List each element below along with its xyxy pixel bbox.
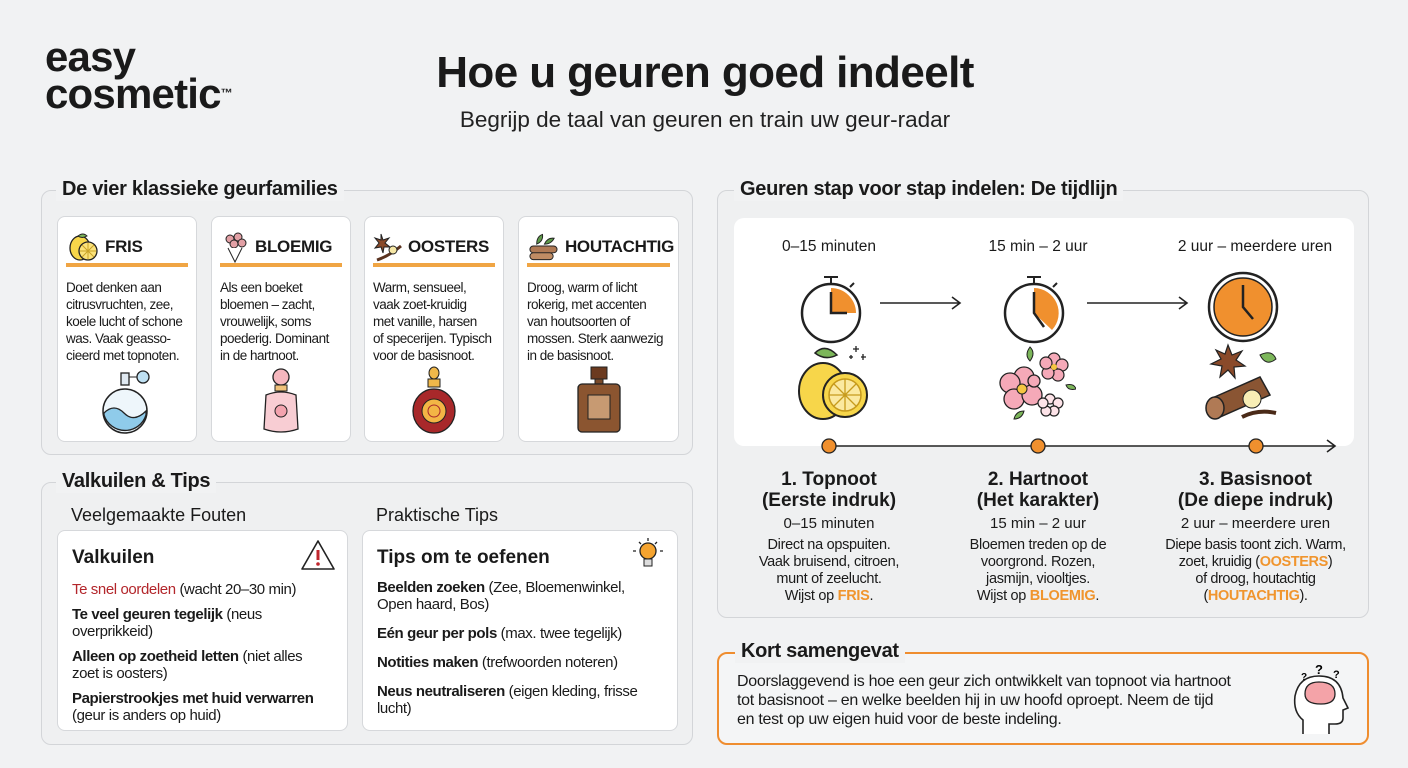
card: OOSTERS bbox=[364, 216, 504, 442]
icon: warning bbox=[301, 540, 335, 570]
icon: lemon bbox=[798, 346, 868, 420]
icon: red bottle bbox=[412, 366, 456, 434]
box: tips: Neus neutraliseren (eigen kleding, frisse bbox=[377, 683, 637, 700]
step 1: Vaak bruisend, citroen, bbox=[759, 554, 899, 570]
panel: tijdlijn: 15 min – 2 uur bbox=[988, 238, 1088, 255]
card: HOUTACHTIG: mossen. Sterk aanwezig bbox=[527, 331, 663, 346]
step 2 bbox=[970, 469, 1106, 604]
heading: families: De vier klassieke geurfamilies bbox=[62, 178, 338, 200]
white area bbox=[734, 218, 1354, 446]
text: summary: Doorslaggevend is hoe een geur zich ontwikkelt van topnoot via hartnoot bbox=[737, 673, 1231, 690]
card: OOSTERS: voor de basisnoot. bbox=[373, 348, 474, 363]
box: tips: Notities maken (trefwoorden noteren) bbox=[377, 654, 618, 671]
card: OOSTERS: Warm, sensueel, bbox=[373, 280, 466, 295]
step 3 bbox=[1165, 469, 1346, 604]
heading: valkuilen: Valkuilen & Tips bbox=[62, 470, 210, 492]
timeline bbox=[821, 438, 1336, 454]
step 3: zoet, kruidig (OOSTERS) bbox=[1179, 554, 1332, 570]
logo bbox=[45, 33, 232, 117]
icon: stopwatch 2 bbox=[1004, 276, 1064, 344]
step 3: (HOUTACHTIG). bbox=[1203, 588, 1308, 604]
card: HOUTACHTIG: van houtsoorten of bbox=[527, 314, 630, 329]
step 1: Direct na opspuiten. bbox=[768, 537, 890, 553]
card: HOUTACHTIG: in de basisnoot. bbox=[527, 348, 614, 363]
box: valkuilen: Valkuilen bbox=[72, 547, 154, 568]
logo: easy bbox=[45, 33, 135, 80]
panel: tijdlijn bbox=[717, 190, 1369, 618]
card: FRIS: was. Vaak geasso- bbox=[66, 331, 171, 346]
card: BLOEMIG: Als een boeket bbox=[220, 280, 302, 295]
icon: lightbulb bbox=[633, 538, 663, 566]
subheading: tips: Praktische Tips bbox=[376, 505, 498, 525]
card: FRIS: cieerd met topnoten. bbox=[66, 348, 179, 363]
icon: head with brain: ? bbox=[1315, 662, 1323, 677]
card: HOUTACHTIG: HOUTACHTIG bbox=[565, 237, 674, 256]
step 3: 2 uur – meerdere uren bbox=[1181, 515, 1330, 532]
step 3: of droog, houtachtig bbox=[1195, 571, 1316, 587]
icon: spices bbox=[1205, 343, 1277, 420]
step 3: (De diepe indruk) bbox=[1178, 490, 1333, 511]
icon: head with brain: ? bbox=[1301, 672, 1307, 683]
step 2: 2. Hartnoot bbox=[988, 469, 1088, 490]
arrow 1 bbox=[880, 296, 962, 310]
box: tips: lucht) bbox=[377, 700, 411, 717]
box: valkuilen: zoet is oosters) bbox=[72, 665, 167, 682]
step 1: 0–15 minuten bbox=[784, 515, 874, 532]
step 2: Wijst op BLOEMIG. bbox=[977, 588, 1099, 604]
card: BLOEMIG: poederig. Dominant bbox=[220, 331, 329, 346]
card: OOSTERS: vaak zoet-kruidig bbox=[373, 297, 467, 312]
icon: head with brain bbox=[1294, 662, 1349, 734]
step 1: (Eerste indruk) bbox=[762, 490, 896, 511]
heading: samenvatting: Kort samengevat bbox=[741, 640, 899, 662]
time labels: 0–15 minuten bbox=[782, 238, 876, 255]
box: tips: Open haard, Bos) bbox=[377, 596, 489, 613]
card: HOUTACHTIG: Droog, warm of licht bbox=[527, 280, 637, 295]
icon: head with brain: ? bbox=[1333, 669, 1340, 681]
card: BLOEMIG: BLOEMIG bbox=[255, 237, 332, 256]
icon: flowers bbox=[999, 346, 1076, 420]
card: BLOEMIG: bloemen – zacht, bbox=[220, 297, 315, 312]
box: valkuilen: (geur is anders op huid) bbox=[72, 707, 221, 724]
box: valkuilen: Te veel geuren tegelijk (neus bbox=[72, 606, 262, 623]
card: HOUTACHTIG: rokerig, met accenten bbox=[527, 297, 646, 312]
panel: samenvatting bbox=[717, 652, 1369, 745]
step 1 bbox=[759, 469, 899, 604]
box: valkuilen: Papierstrookjes met huid verwarren bbox=[72, 690, 314, 707]
box: valkuilen: Te snel oordelen (wacht 20–30 min) bbox=[72, 581, 296, 598]
step 2: jasmijn, viooltjes. bbox=[986, 571, 1090, 587]
subheading: fouten: Veelgemaakte Fouten bbox=[71, 505, 246, 525]
title: Hoe u geuren goed indeelt bbox=[436, 48, 974, 97]
text: summary bbox=[737, 673, 1231, 728]
card: FRIS: Doet denken aan bbox=[66, 280, 161, 295]
card: OOSTERS: OOSTERS bbox=[408, 237, 489, 256]
card: FRIS: FRIS bbox=[105, 237, 143, 256]
step 3: Diepe basis toont zich. Warm, bbox=[1165, 537, 1346, 553]
box: valkuilen: Alleen op zoetheid letten (niet alles bbox=[72, 648, 302, 665]
arrow 2 bbox=[1087, 296, 1188, 310]
subtitle: Begrijp de taal van geuren en train uw geur-radar bbox=[460, 107, 950, 132]
step 2: 15 min – 2 uur bbox=[990, 515, 1086, 532]
card: BLOEMIG: vrouwelijk, soms bbox=[220, 314, 311, 329]
card: BLOEMIG bbox=[211, 216, 351, 442]
icon: stopwatch 1 bbox=[800, 276, 862, 344]
box: tips: Tips om te oefenen bbox=[377, 547, 550, 568]
panel: geurfamilies bbox=[41, 190, 693, 455]
logo: cosmetic™ bbox=[45, 70, 232, 117]
text: summary: en test op uw eigen huid voor de beste indeling. bbox=[737, 711, 1062, 728]
box: valkuilen bbox=[57, 530, 348, 731]
step 2: voorgrond. Rozen, bbox=[981, 554, 1095, 570]
step 2: Bloemen treden op de bbox=[970, 537, 1106, 553]
box: tips: Beelden zoeken (Zee, Bloemenwinkel, bbox=[377, 579, 625, 596]
step 3: 3. Basisnoot bbox=[1199, 469, 1312, 490]
box: tips bbox=[362, 530, 678, 731]
box: tips: Eén geur per pols (max. twee tegelijk) bbox=[377, 625, 622, 642]
card: OOSTERS: of specerijen. Typisch bbox=[373, 331, 492, 346]
box: valkuilen: overprikkeid) bbox=[72, 623, 153, 640]
card: FRIS: koele lucht of schone bbox=[66, 314, 182, 329]
card: BLOEMIG: in de hartnoot. bbox=[220, 348, 299, 363]
icon: clock 3 bbox=[1208, 272, 1278, 342]
step 1: 1. Topnoot bbox=[781, 469, 877, 490]
panel: tijdlijn: 2 uur – meerdere uren bbox=[1178, 238, 1332, 255]
card: OOSTERS: met vanille, harsen bbox=[373, 314, 477, 329]
text: summary: tot basisnoot – en welke beelden hij in uw hoofd oproept. Neem de tijd bbox=[737, 692, 1213, 709]
step 1: Wijst op FRIS. bbox=[785, 588, 873, 604]
step 1: munt of zeelucht. bbox=[776, 571, 882, 587]
icon: brown bottle bbox=[577, 366, 621, 433]
panel: valkuilen & tips bbox=[41, 482, 693, 745]
step 2: (Het karakter) bbox=[977, 490, 1099, 511]
card: HOUTACHTIG bbox=[518, 216, 679, 442]
heading: tijdlijn: Geuren stap voor stap indelen: De tijdlijn bbox=[740, 178, 1117, 200]
card: FRIS bbox=[57, 216, 197, 442]
icon: blue bottle bbox=[102, 370, 150, 434]
icon: pink bottle bbox=[263, 368, 299, 433]
card: FRIS: citrusvruchten, zee, bbox=[66, 297, 173, 312]
